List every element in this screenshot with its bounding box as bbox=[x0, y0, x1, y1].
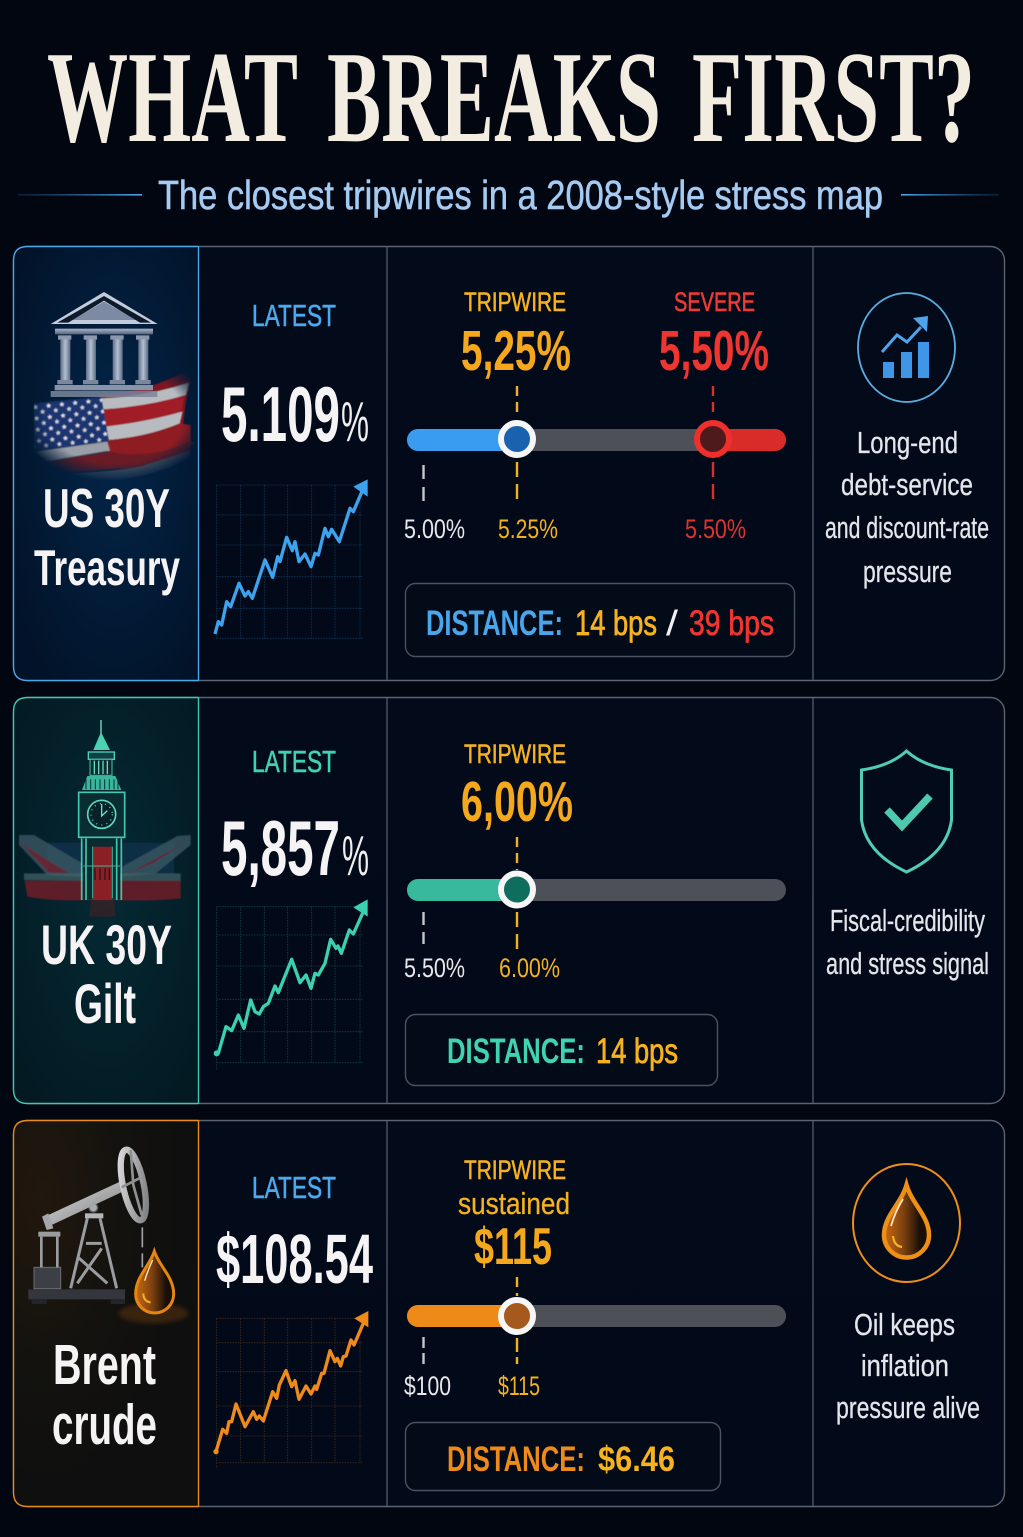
slider: UK bbox=[407, 837, 786, 952]
latest value: Brent: LATEST bbox=[252, 1170, 336, 1205]
label: UK 30Y Gilt: Gilt bbox=[74, 972, 136, 1035]
distance box: Brent: DISTANCE: bbox=[447, 1440, 585, 1479]
scale labels: UK bbox=[404, 953, 560, 983]
divider bbox=[386, 698, 388, 1103]
line chart: Brent bbox=[213, 1311, 368, 1468]
latest value: UK bbox=[221, 744, 369, 892]
description: US: pressure bbox=[863, 554, 952, 589]
distance box: US: 39 bps bbox=[689, 604, 774, 643]
divider bbox=[812, 1121, 814, 1506]
description: Brent: inflation bbox=[861, 1348, 949, 1383]
slider: US bbox=[407, 386, 786, 501]
scale labels: Brent: $100 bbox=[404, 1371, 451, 1401]
description: Brent: Oil keeps bbox=[854, 1307, 955, 1342]
latest value: US bbox=[221, 298, 369, 458]
slider: Brent bbox=[407, 1277, 786, 1364]
scale labels: UK: 5.50% bbox=[404, 953, 465, 983]
scale labels: UK: 6.00% bbox=[499, 953, 560, 983]
tripwire labels: Brent: sustained bbox=[458, 1186, 570, 1221]
line chart: UK bbox=[214, 899, 368, 1070]
tripwire labels: US bbox=[461, 287, 769, 383]
identity column: UK bbox=[14, 697, 198, 1104]
panel: US 30Y Treasury bbox=[14, 246, 1004, 681]
icon: shield with check bbox=[862, 751, 952, 872]
label: UK 30Y Gilt bbox=[41, 913, 172, 1035]
description: US: debt-service bbox=[841, 467, 973, 502]
scale labels: US: 5.50% bbox=[685, 514, 746, 544]
latest value: US: LATEST bbox=[252, 298, 336, 333]
tripwire labels: US: 5,25% bbox=[461, 319, 571, 383]
title: WHAT bbox=[47, 25, 298, 170]
description: US bbox=[825, 425, 989, 589]
latest value: US: 5.109 bbox=[221, 370, 340, 458]
title: BREAKS bbox=[327, 25, 661, 170]
label: Brent crude: crude bbox=[52, 1393, 157, 1457]
distance box: Brent bbox=[406, 1422, 720, 1490]
tripwire labels: UK bbox=[461, 739, 573, 834]
label: US 30Y Treasury: Treasury bbox=[34, 540, 180, 596]
label: Brent crude bbox=[52, 1333, 157, 1457]
distance box: US: / bbox=[666, 604, 678, 643]
latest value: Brent: $108.54 bbox=[216, 1220, 373, 1298]
distance box: Brent: $6.46 bbox=[598, 1440, 675, 1479]
label: UK 30Y Gilt: UK 30Y bbox=[41, 913, 172, 976]
latest value: Brent bbox=[216, 1170, 373, 1298]
latest value: US: % bbox=[341, 390, 369, 454]
distance box: US bbox=[406, 584, 794, 656]
scale labels: US: 5.00% bbox=[404, 514, 465, 544]
tripwire labels: Brent: TRIPWIRE bbox=[464, 1155, 566, 1185]
identity column: US bbox=[14, 246, 198, 681]
tripwire labels: UK: TRIPWIRE bbox=[464, 739, 566, 769]
label: US 30Y Treasury: US 30Y bbox=[43, 477, 170, 539]
line chart: US bbox=[215, 479, 368, 638]
label: Brent crude: Brent bbox=[53, 1333, 156, 1397]
tripwire labels: US: 5,50% bbox=[659, 319, 769, 383]
divider bbox=[812, 698, 814, 1103]
description: Brent bbox=[836, 1307, 980, 1425]
latest value: UK: 5,857 bbox=[221, 804, 340, 892]
divider bbox=[386, 247, 388, 680]
scale labels: Brent bbox=[404, 1371, 540, 1401]
icon: US flag and bank bbox=[34, 292, 194, 480]
label: US 30Y Treasury bbox=[34, 477, 180, 596]
tripwire labels: Brent bbox=[458, 1155, 570, 1276]
scale labels: US bbox=[404, 514, 746, 544]
icon: oil pumpjack and drop bbox=[28, 1148, 188, 1323]
title bbox=[47, 25, 975, 170]
distance box: US: DISTANCE: bbox=[426, 604, 563, 643]
scale labels: US: 5.25% bbox=[498, 514, 558, 544]
distance box: UK bbox=[406, 1014, 718, 1086]
description: UK bbox=[826, 903, 989, 981]
tripwire labels: UK: 6,00% bbox=[461, 770, 573, 834]
divider bbox=[812, 247, 814, 680]
tripwire labels: US: TRIPWIRE bbox=[464, 287, 566, 317]
description: US: Long-end bbox=[857, 425, 958, 460]
distance box: US: 14 bps bbox=[575, 604, 657, 643]
identity column: Brent bbox=[14, 1120, 198, 1507]
panel: Brent crude bbox=[14, 1120, 1004, 1507]
scale labels: Brent: $115 bbox=[498, 1371, 540, 1401]
distance box: UK: 14 bps bbox=[596, 1032, 678, 1071]
icon: oil drop in circle bbox=[853, 1164, 960, 1282]
icon: rising bar chart bbox=[858, 293, 955, 402]
divider bbox=[386, 1121, 388, 1506]
latest value: UK: LATEST bbox=[252, 744, 336, 779]
tripwire labels: Brent: $115 bbox=[474, 1218, 552, 1276]
tripwire labels: US: SEVERE bbox=[674, 287, 755, 317]
panel: UK 30Y Gilt bbox=[14, 697, 1004, 1104]
icon: Big Ben and Union flag bbox=[19, 720, 191, 917]
latest value: UK: % bbox=[342, 824, 369, 888]
subtitle: The closest tripwires in a 2008-style stress map bbox=[158, 172, 883, 218]
distance box: UK: DISTANCE: bbox=[447, 1032, 585, 1071]
